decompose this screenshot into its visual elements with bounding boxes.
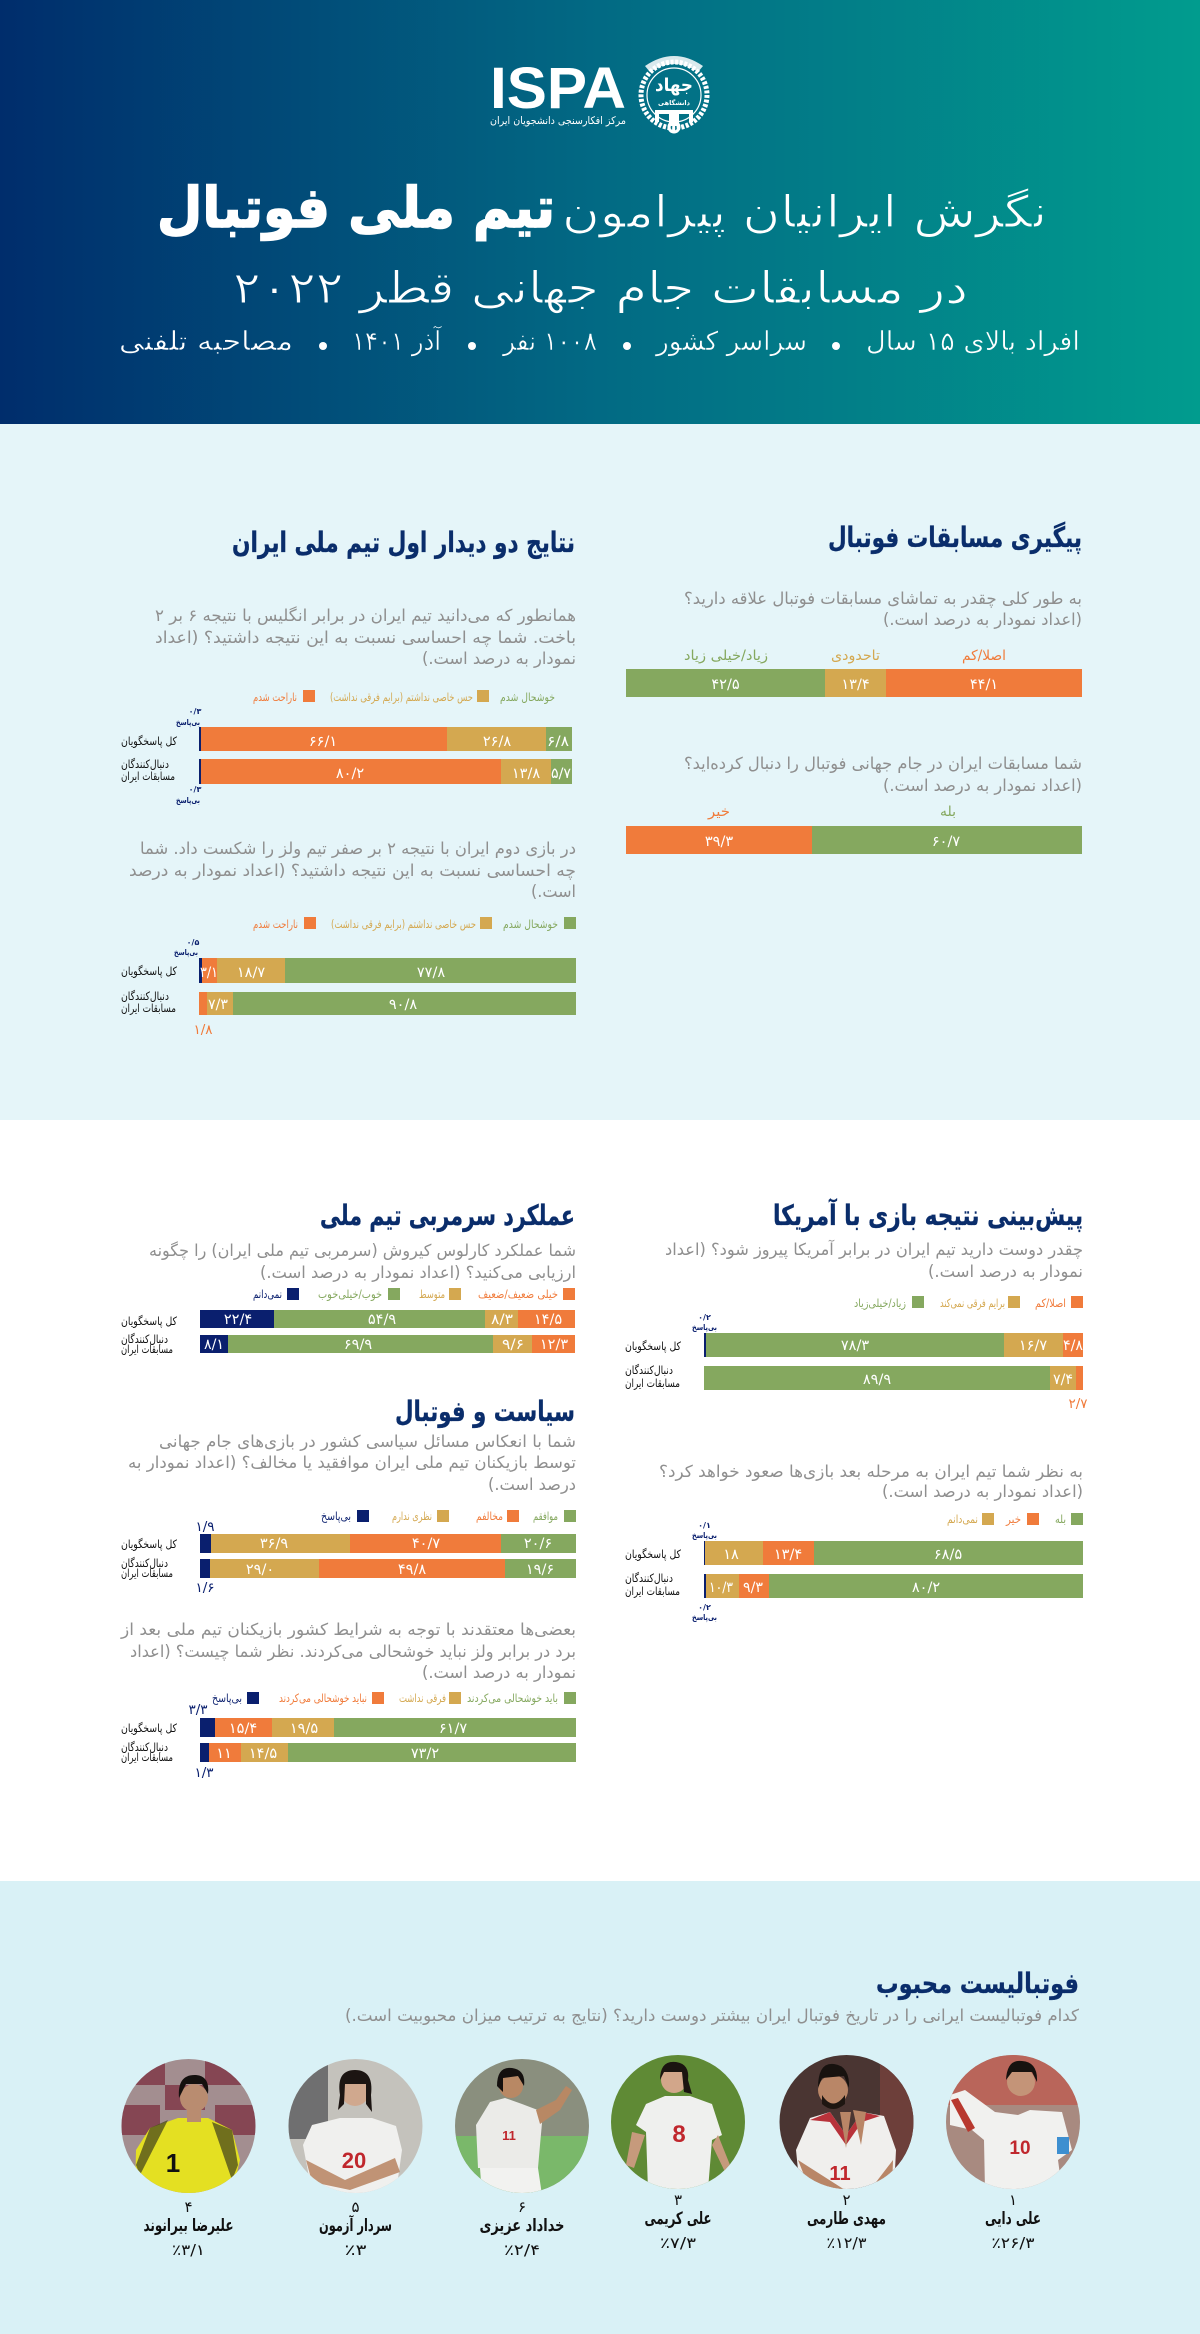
player 1: Ali Daei (946, 2055, 1080, 2252)
chart: interest in football: زیاد/خیلی زیاد (684, 648, 768, 664)
legend: Wales match: ناراحت شدم (253, 917, 298, 932)
rank, name and share (144, 2198, 234, 2259)
question: celebrating the win: برد در برابر ولز نباید خوشحالی می‌کردند. نظر شما چیست؟ (اعداد (130, 1642, 576, 1662)
survey facts line: افراد بالای ۱۵ سال (866, 327, 1080, 357)
chart: advancing to next round: ۱۳/۴ (774, 1547, 802, 1563)
portrait: Sardar Azmoun: 20 (342, 2148, 366, 2173)
player 2: Mehdi Taremi (779, 2055, 914, 2252)
legend: want Iran to win: زیاد/خیلی‌زیاد (854, 1296, 906, 1311)
chart: celebrating the win: ۳/۳ (188, 1702, 208, 1718)
chart: celebrating the win: ۱۵/۴ (229, 1721, 257, 1737)
question: celebrating the win: نمودار به درصد است.) (422, 1663, 576, 1683)
chart: political reflection: ۱/۹ (195, 1519, 215, 1535)
question: advancing to next round (659, 1462, 1083, 1502)
question: celebrating the win: بعضی‌ها معتقدند با توجه به شرایط کشور بازیکنان تیم ملی بعد از (120, 1620, 576, 1640)
chart: England match: ۲۶/۸ (483, 734, 511, 750)
chart: want Iran to win: ۰/۲ (698, 1313, 711, 1322)
portrait: Sardar Azmoun (288, 2059, 423, 2193)
rank, name and share: ٪۳/۱ (172, 2241, 205, 2259)
question: England match: نمودار به درصد است.) (422, 649, 576, 669)
question one (684, 589, 1082, 630)
chart: Wales match: ۰/۵ (187, 938, 199, 947)
chart: celebrating the win: دنبال‌کنندگان (121, 1740, 168, 1754)
legend: coach performance (253, 1287, 575, 1302)
chart: coach performance: مسابقات ایران (121, 1342, 173, 1357)
logo: ISPA wordmark: ISPA (490, 56, 626, 121)
heading: پیش‌بینی نتیجه بازی با آمریکا (773, 1198, 1083, 1232)
chart: Wales match: مسابقات ایران (121, 1001, 176, 1016)
chart: Wales match: ۹۰/۸ (389, 997, 417, 1013)
panel: politics and football (120, 1395, 576, 1781)
legend: advancing to next round: بله (1055, 1512, 1066, 1526)
title line two: در مسابقات جام جهانی قطر ۲۰۲۲ (233, 263, 968, 314)
chart: coach performance: ۶۹/۹ (344, 1337, 372, 1353)
chart: coach performance: دنبال‌کنندگان (121, 1332, 168, 1346)
chart: followed Iran's matches: ۶۰/۷ (932, 834, 960, 850)
chart: Wales match: ۳/۱ (200, 965, 218, 981)
chart: advancing to next round: ۰/۱ (698, 1521, 711, 1530)
panel: prediction of USA match (625, 1198, 1088, 1622)
rank, name and share: ۳ (674, 2191, 682, 2209)
player 6: Alireza Beiranvand (121, 2059, 256, 2259)
legend: celebrating the win: فرقی نداشت (399, 1691, 446, 1706)
chart: interest in football: ۱۳/۴ (841, 677, 870, 693)
chart: celebrating the win: ۱/۳ (194, 1765, 214, 1781)
player 4: Khodadad Azizi (455, 2059, 590, 2259)
legend: political reflection (321, 1509, 576, 1524)
chart: political reflection: ۱/۶ (195, 1580, 215, 1596)
chart: England match: دنبال‌کنندگان (121, 757, 169, 771)
legend: Wales match: خوشحال شدم (503, 917, 558, 932)
rank, name and share: علی کریمی (644, 2209, 712, 2229)
chart: England match: ۰/۳ (189, 707, 201, 716)
legend: England match: خوشحال شدم (500, 690, 555, 705)
chart: want Iran to win: ۷۸/۳ (841, 1338, 869, 1354)
chart: celebrating the win: کل پاسخگویان (121, 1721, 177, 1736)
chart: interest in football: ۴۲/۵ (711, 677, 740, 693)
chart: coach performance: ۵۴/۹ (368, 1312, 396, 1328)
chart: want Iran to win (625, 1313, 1088, 1412)
chart: England match: ۶۶/۱ (309, 734, 337, 750)
rank, name and share (480, 2198, 564, 2259)
question: Wales match: چه احساسی نسبت به این نتیجه داشتید؟ (اعداد نمودار به درصد (129, 861, 576, 881)
question: want Iran to win: چقدر دوست دارید تیم ایران در برابر آمریکا پیروز شود؟ (اعداد (665, 1240, 1083, 1260)
chart: want Iran to win: ۷/۴ (1053, 1372, 1073, 1388)
title line one: نگرش ایرانیان پیرامون (562, 187, 1047, 238)
legend: celebrating the win: بی‌پاسخ (212, 1691, 242, 1705)
legend: coach performance: خوب/خیلی‌خوب (318, 1287, 382, 1302)
panel: header banner (0, 0, 1200, 424)
chart: England match: ۵/۷ (551, 766, 571, 782)
chart: celebrating the win: ۶۱/۷ (439, 1721, 467, 1737)
chart: want Iran to win: ۸۹/۹ (863, 1372, 891, 1388)
portrait: Khodadad Azizi (455, 2059, 590, 2195)
chart: advancing to next round: ۰/۲ (698, 1603, 711, 1612)
panel: following football matches (626, 521, 1082, 854)
chart: advancing to next round: ۹/۳ (743, 1580, 763, 1596)
rank, name and share (644, 2191, 712, 2252)
rank, name and share: ۶ (518, 2198, 526, 2216)
rank, name and share: مهدی طارمی (807, 2209, 886, 2229)
rank, name and share: علیرضا بیرانوند (144, 2216, 234, 2236)
heading: نتایج دو دیدار اول تیم ملی ایران (232, 526, 575, 559)
chart: advancing to next round: ۱۸ (723, 1547, 739, 1563)
chart: advancing to next round: مسابقات ایران (625, 1584, 680, 1599)
chart: coach performance (121, 1310, 575, 1357)
legend: celebrating the win: باید خوشحالی می‌کردند (467, 1691, 558, 1706)
legend: advancing to next round (947, 1512, 1083, 1527)
chart: political reflection: ۳۶/۹ (260, 1536, 288, 1552)
chart: political reflection: ۲۹/۰ (246, 1562, 274, 1578)
legend: coach performance: خیلی ضعیف/ضعیف (478, 1287, 558, 1301)
legend: political reflection: بی‌پاسخ (321, 1509, 351, 1523)
title line one (157, 176, 1047, 241)
chart: Wales match (121, 938, 576, 1038)
chart: interest in football: تاحدودی (831, 648, 880, 664)
chart: Wales match: ۱۸/۷ (237, 965, 265, 981)
legend: advancing to next round: خیر (1005, 1512, 1021, 1527)
chart: political reflection: کل پاسخگویان (121, 1537, 177, 1552)
chart: coach performance: کل پاسخگویان (121, 1314, 177, 1329)
chart: advancing to next round: بی‌پاسخ (692, 1531, 717, 1540)
chart: advancing to next round: کل پاسخگویان (625, 1547, 681, 1562)
chart: coach performance: ۱۲/۳ (540, 1337, 568, 1353)
survey facts line: ۱۰۰۸ نفر (501, 327, 597, 357)
rank, name and share (319, 2198, 392, 2259)
chart: England match: ۱۳/۸ (512, 766, 540, 782)
chart: England match: ۶/۸ (547, 734, 569, 750)
legend: want Iran to win: اصلا/کم (1035, 1296, 1066, 1310)
chart: want Iran to win: کل پاسخگویان (625, 1339, 681, 1354)
question: political reflection: توسط بازیکنان تیم ملی ایران موافقید یا مخالف؟ (اعداد نمودار به (128, 1453, 576, 1473)
chart: England match: بی‌پاسخ (176, 718, 200, 727)
survey facts line (119, 325, 1080, 357)
rank, name and share: ٪۷/۳ (660, 2234, 696, 2252)
player 5: Sardar Azmoun (288, 2059, 423, 2259)
legend: want Iran to win (854, 1296, 1083, 1311)
question: want Iran to win (665, 1240, 1083, 1282)
chart: Wales match: بی‌پاسخ (174, 948, 198, 957)
legend: England match (253, 690, 555, 705)
title line one: تیم ملی فوتبال (157, 176, 555, 241)
rank, name and share: ٪۱۲/۳ (826, 2234, 866, 2252)
chart: England match: بی‌پاسخ (176, 796, 200, 805)
heading: عملکرد سرمربی تیم ملی (320, 1199, 575, 1232)
portrait: Mehdi Taremi (779, 2055, 914, 2190)
chart: political reflection: ۴۹/۸ (398, 1562, 426, 1578)
rank, name and share: خداداد عزیزی (480, 2216, 564, 2236)
question two (684, 754, 1082, 796)
chart: advancing to next round: ۱۰/۳ (709, 1580, 733, 1596)
legend: coach performance: متوسط (419, 1287, 445, 1302)
question: want Iran to win: نمودار به درصد است.) (928, 1262, 1083, 1282)
chart: interest in football: ۴۴/۱ (970, 677, 998, 693)
rank, name and share: علی دایی (985, 2209, 1041, 2229)
chart: want Iran to win: بی‌پاسخ (692, 1323, 717, 1332)
chart: want Iran to win: دنبال‌کنندگان (625, 1363, 673, 1377)
question: advancing to next round: (اعداد نمودار به درصد است.) (882, 1482, 1083, 1502)
rank, name and share: ۴ (184, 2198, 193, 2216)
survey facts line: مصاحبه تلفنی (119, 327, 293, 357)
question: England match (155, 606, 576, 669)
heading: پیگیری مسابقات فوتبال (828, 521, 1082, 554)
survey facts line: سراسر کشور (654, 327, 807, 357)
question one: (اعداد نمودار به درصد است.) (883, 610, 1082, 630)
rank, name and share: ۱ (1009, 2191, 1017, 2209)
question: England match: باخت. شما چه احساسی نسبت به این نتیجه داشتید؟ (اعداد (155, 628, 576, 647)
chart: advancing to next round: دنبال‌کنندگان (625, 1571, 673, 1585)
chart: interest in football (626, 648, 1082, 697)
legend: England match: حس خاصی نداشتم (برایم فرقی نداشت) (330, 690, 473, 705)
chart: Wales match: دنبال‌کنندگان (121, 989, 169, 1003)
chart: advancing to next round: ۶۸/۵ (934, 1547, 962, 1563)
legend: Wales match (253, 917, 576, 932)
portrait: Alireza Beiranvand (121, 2059, 256, 2193)
question one: به طور کلی چقدر به تماشای مسابقات فوتبال علاقه دارید؟ (684, 589, 1082, 609)
chart: Wales match: کل پاسخگویان (121, 964, 177, 979)
portrait: Khodadad Azizi: 11 (502, 2128, 516, 2143)
question two: شما مسابقات ایران در جام جهانی فوتبال را دنبال کرده‌اید؟ (684, 754, 1082, 774)
chart: celebrating the win: ۱۹/۵ (290, 1721, 318, 1737)
question: Wales match: در بازی دوم ایران با نتیجه ۲ بر صفر تیم ولز را شکست داد. شما (140, 839, 576, 859)
chart: Wales match: ۷۷/۸ (417, 965, 445, 981)
question two: (اعداد نمودار به درصد است.) (883, 776, 1082, 796)
chart: celebrating the win: مسابقات ایران (121, 1750, 173, 1765)
portrait: Ali Karimi: 8 (672, 2121, 686, 2148)
question: political reflection: شما با انعکاس مسائل سیاسی کشور در بازی‌های جام جهانی (159, 1432, 576, 1452)
heading: سیاست و فوتبال (395, 1395, 575, 1428)
rank, name and share (985, 2191, 1041, 2252)
heading: فوتبالیست محبوب (876, 1967, 1079, 2000)
chart: England match (121, 707, 572, 805)
chart: political reflection: مسابقات ایران (121, 1566, 173, 1581)
legend: political reflection: نظری ندارم (392, 1509, 432, 1524)
legend: England match: ناراحت شدم (253, 690, 297, 705)
chart: coach performance: ۹/۶ (502, 1337, 524, 1353)
portrait: Alireza Beiranvand: 1 (166, 2148, 180, 2178)
chart: coach performance: ۲۲/۴ (224, 1312, 252, 1328)
chart: Wales match: ۷/۳ (208, 997, 228, 1013)
legend: Wales match: حس خاصی نداشتم (برایم فرقی نداشت) (331, 917, 476, 932)
legend: political reflection: مخالفم (476, 1509, 503, 1523)
question: political reflection (128, 1432, 576, 1495)
legend: want Iran to win: برایم فرقی نمی‌کند (940, 1296, 1005, 1311)
chart: followed Iran's matches: خیر (707, 804, 730, 820)
question: coach performance: شما عملکرد کارلوس کیروش (سرمربی تیم ملی ایران) را چگونه (149, 1241, 576, 1261)
question: coach performance (149, 1241, 576, 1283)
survey facts line: آذر ۱۴۰۱ (352, 325, 443, 357)
chart: followed Iran's matches: بله (940, 804, 956, 820)
chart: interest in football: اصلا/کم (962, 648, 1006, 664)
chart: Wales match: ۱/۸ (193, 1022, 213, 1038)
chart: England match: ۸۰/۲ (336, 766, 364, 782)
chart: England match: ۰/۳ (189, 785, 201, 794)
chart: coach performance: ۸/۳ (491, 1312, 513, 1328)
portrait: Ali Karimi (610, 2055, 745, 2190)
legend: coach performance: نمی‌دانم (253, 1287, 282, 1301)
chart: coach performance: ۸/۱ (204, 1337, 224, 1353)
chart: political reflection (121, 1519, 576, 1596)
rank, name and share: ۵ (351, 2198, 360, 2216)
rank, name and share: ۲ (842, 2191, 851, 2209)
legend: political reflection: موافقم (533, 1509, 558, 1524)
chart: celebrating the win: ۱۱ (216, 1746, 232, 1762)
chart: want Iran to win: مسابقات ایران (625, 1376, 680, 1391)
rank, name and share (807, 2191, 886, 2252)
question: England match: همانطور که می‌دانید تیم ایران در برابر انگلیس با نتیجه ۶ بر ۲ (155, 606, 576, 626)
chart: England match: مسابقات ایران (121, 769, 175, 784)
chart: political reflection: ۴۰/۷ (412, 1536, 440, 1552)
rank, name and share: سردار آزمون (319, 2214, 392, 2236)
question: coach performance: ارزیابی می‌کنید؟ (اعداد نمودار به درصد است.) (260, 1263, 576, 1283)
chart: England match: کل پاسخگویان (121, 734, 177, 749)
legend: celebrating the win (212, 1691, 576, 1706)
rank, name and share: ٪۲/۴ (504, 2241, 540, 2259)
question: political reflection: درصد است.) (488, 1475, 576, 1495)
chart: celebrating the win: ۷۳/۲ (411, 1746, 439, 1762)
chart: followed Iran's matches (626, 804, 1082, 854)
portrait: Ali Daei (946, 2055, 1080, 2190)
chart: advancing to next round (625, 1521, 1083, 1622)
chart: want Iran to win: ۲/۷ (1068, 1396, 1088, 1412)
chart: want Iran to win: ۴/۸ (1063, 1338, 1083, 1354)
portrait: Mehdi Taremi: 11 (829, 2163, 851, 2185)
legend: advancing to next round: نمی‌دانم (947, 1512, 978, 1526)
question: celebrating the win (120, 1620, 576, 1683)
chart: followed Iran's matches: ۳۹/۳ (705, 834, 733, 850)
question: advancing to next round: به نظر شما تیم ایران به مرحله بعد بازی‌ها صعود خواهد کرد؟ (659, 1462, 1083, 1482)
panel: results of Iran's first two matches (121, 526, 576, 1038)
panel: national team coach performance (121, 1199, 576, 1357)
logo: Jahad Daneshgahi emblem (641, 56, 707, 132)
rank, name and share: ٪۳ (344, 2241, 366, 2259)
rank, name and share: ٪۲۶/۳ (992, 2234, 1034, 2252)
chart: advancing to next round: بی‌پاسخ (692, 1613, 717, 1622)
chart: political reflection: دنبال‌کنندگان (121, 1556, 168, 1570)
chart: political reflection: ۱۹/۶ (526, 1562, 554, 1578)
chart: want Iran to win: ۱۶/۷ (1019, 1338, 1047, 1354)
chart: celebrating the win (121, 1702, 576, 1781)
legend: celebrating the win: نباید خوشحالی می‌کردند (279, 1691, 367, 1706)
logo: Jahad Daneshgahi emblem: جهاد (655, 75, 693, 96)
portrait: Ali Daei: 10 (1009, 2138, 1031, 2159)
chart: political reflection: ۲۰/۶ (524, 1536, 552, 1552)
logo: Jahad Daneshgahi emblem: دانشگاهی (658, 99, 691, 107)
question: Wales match: است.) (531, 882, 576, 901)
logo: ISPA wordmark: مرکز افکارسنجی دانشجویان ایران (490, 115, 626, 127)
chart: celebrating the win: ۱۴/۵ (249, 1746, 277, 1762)
question: favourite footballer: کدام فوتبالیست ایرانی را در تاریخ فوتبال ایران بیشتر دوست دارید؟ (نتایج به ترتیب میزان محبوبیت است.) (345, 2006, 1079, 2026)
chart: advancing to next round: ۸۰/۲ (912, 1580, 940, 1596)
player 3: Ali Karimi (610, 2055, 745, 2252)
question: Wales match (129, 839, 576, 901)
panel: favourite footballer (121, 1967, 1080, 2259)
chart: coach performance: ۱۴/۵ (534, 1312, 562, 1328)
